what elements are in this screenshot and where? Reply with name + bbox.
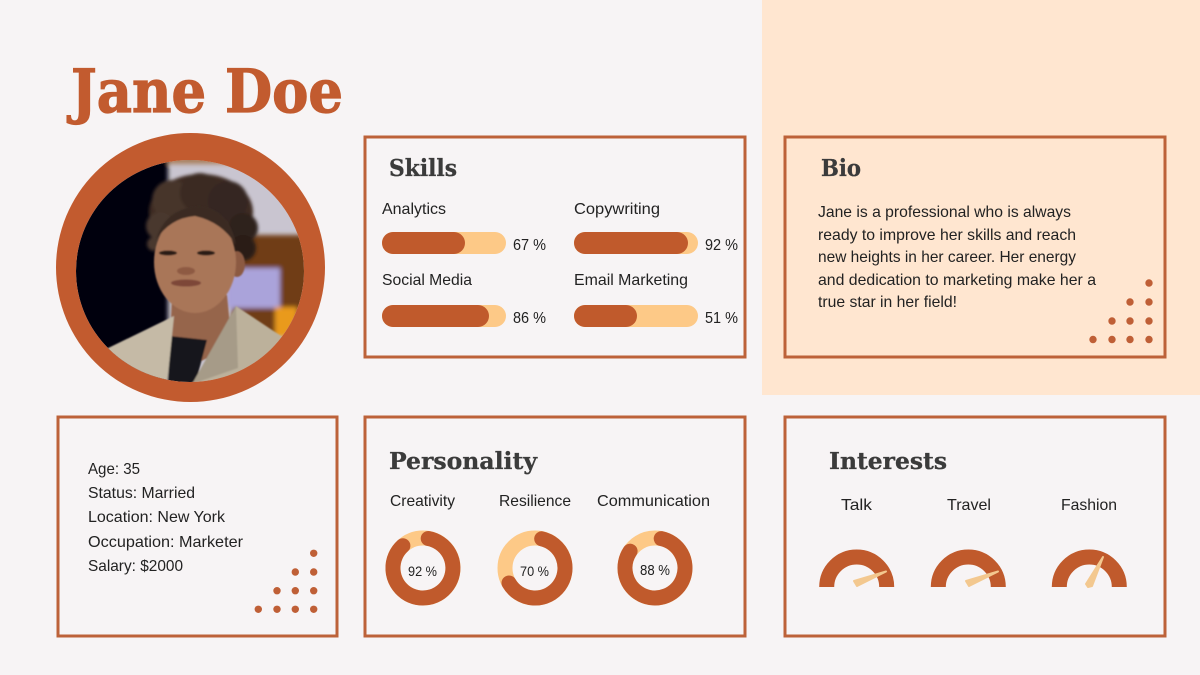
donut: creativity 92% <box>390 493 455 598</box>
gauge: fashion: Fashion <box>1061 497 1117 514</box>
skill: email marketing: Email Marketing <box>574 272 688 289</box>
donut: communication 88%: 88 % <box>640 562 670 579</box>
panel: bio <box>785 137 1165 357</box>
donut: creativity 92%: Creativity <box>390 493 455 510</box>
bio text: new heights in her career. Her energy <box>818 249 1076 266</box>
gauge: travel <box>938 497 998 587</box>
donut: communication 88%: Communication <box>597 493 710 510</box>
skill: analytics: Analytics <box>382 201 446 218</box>
heading: interests: Interests <box>829 448 947 475</box>
donut: creativity 92%: 92 % <box>408 563 437 579</box>
heading: personality: Personality <box>389 448 538 475</box>
bio text: and dedication to marketing make her a <box>818 272 1096 289</box>
skill: copywriting: Copywriting <box>574 201 660 218</box>
gauge: talk <box>827 497 887 587</box>
donut: resilience 70% <box>499 493 571 598</box>
skill: analytics <box>382 201 546 254</box>
bio text: Jane is a professional who is always <box>818 204 1071 221</box>
donut: resilience 70%: Resilience <box>499 493 571 510</box>
bio text: true star in her field! <box>818 294 957 311</box>
details text: Salary: $2000 <box>88 558 183 575</box>
skill: email marketing: 51 % <box>705 310 738 327</box>
gauge: travel: Travel <box>947 497 991 514</box>
details text: Occupation: Marketer <box>88 534 244 551</box>
gauge: talk: Talk <box>841 497 873 514</box>
bio text <box>818 204 1096 311</box>
dot pattern: details <box>255 550 317 613</box>
background panel: peach <box>762 0 1200 395</box>
donut: communication 88% <box>597 493 710 598</box>
skill: copywriting: 92 % <box>705 237 738 254</box>
details text: Age: 35 <box>88 461 140 478</box>
title: Jane Doe <box>66 57 343 127</box>
gauge: fashion <box>1059 497 1119 587</box>
skill: analytics: 67 % <box>513 237 546 254</box>
details text <box>88 461 244 575</box>
skill: social media <box>382 272 546 327</box>
details text: Status: Married <box>88 485 195 502</box>
panel: interests <box>785 417 1165 636</box>
dot pattern: bio <box>1089 279 1153 343</box>
skill: email marketing <box>574 272 738 327</box>
portrait photo with ring <box>56 133 325 402</box>
bio text: ready to improve her skills and reach <box>818 227 1076 244</box>
hair <box>146 173 258 261</box>
skill: social media: 86 % <box>513 310 546 327</box>
skill: social media: Social Media <box>382 272 472 289</box>
heading: bio: Bio <box>821 155 861 182</box>
heading: skills: Skills <box>389 155 457 182</box>
details text: Location: New York <box>88 509 226 526</box>
skill: copywriting <box>574 201 738 254</box>
panel: personality <box>365 417 745 636</box>
donut: resilience 70%: 70 % <box>520 563 549 579</box>
panel: personal details <box>58 417 337 636</box>
panel: skills <box>365 137 745 357</box>
